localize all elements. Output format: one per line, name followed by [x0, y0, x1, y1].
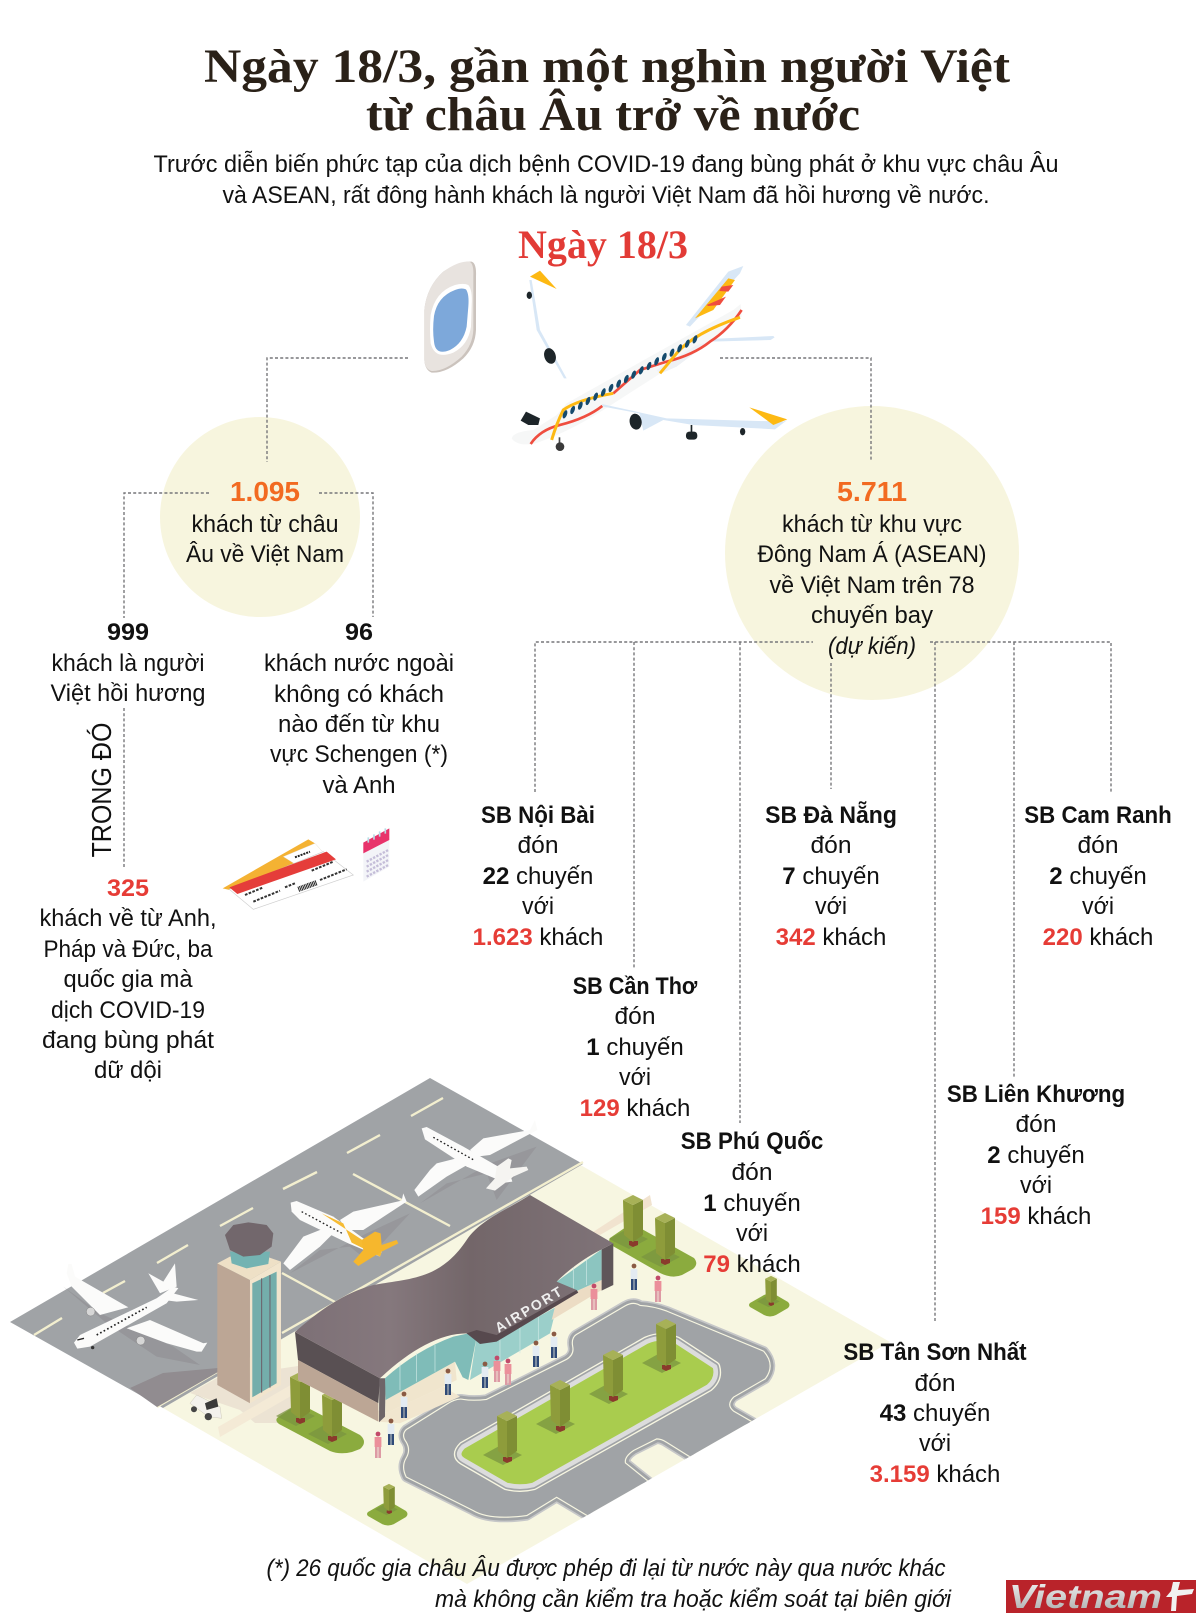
block: Cam Ranh: 220 khách: [1043, 924, 1153, 951]
illustration: airport: [10, 1078, 890, 1584]
block: Cam Ranh: [1024, 801, 1172, 951]
icon: tickets and calendar: [223, 828, 389, 909]
block: Cam Ranh: đón: [1078, 832, 1118, 859]
icon: airplane: [512, 266, 787, 451]
block: Can Tho: 129 khách: [580, 1095, 690, 1122]
block: 999 Vietnamese: Việt hồi hương: [50, 680, 206, 707]
ground: [163, 1163, 890, 1584]
block: Noi Bai: đón: [518, 832, 558, 859]
block: Da Nang: [765, 801, 897, 951]
block: Da Nang: 7 chuyến: [782, 863, 880, 890]
subtitle: [154, 151, 1058, 209]
block: Tan Son Nhat: [843, 1338, 1027, 1488]
terminal building: [295, 1195, 613, 1423]
block: 325 from UK, France, Germany: khách về từ Anh,: [40, 905, 216, 932]
block: 325 from UK, France, Germany: 325: [107, 875, 149, 902]
block: Noi Bai: với: [522, 893, 554, 920]
block: Can Tho: đón: [614, 1003, 656, 1030]
block: Can Tho: [573, 972, 698, 1122]
heading: date: Ngày 18/3: [518, 222, 688, 267]
block: 999 Vietnamese: khách là người: [52, 650, 204, 677]
block: Tan Son Nhat: 3.159 khách: [870, 1461, 1000, 1488]
block: 96 foreigners: nào đến từ khu: [278, 711, 440, 738]
block: Da Nang: 342 khách: [776, 924, 886, 951]
plane top: [414, 1120, 537, 1203]
block: Noi Bai: 22 chuyến: [483, 863, 593, 890]
block: Phu Quoc: [681, 1127, 823, 1278]
block: 325 from UK, France, Germany: [40, 875, 216, 1084]
title: [204, 40, 1010, 141]
block: Noi Bai: SB Nội Bài: [481, 801, 595, 828]
block: 5,711 from ASEAN: Đông Nam Á (ASEAN): [758, 541, 986, 568]
block: Da Nang: đón: [810, 832, 852, 859]
block: Can Tho: 1 chuyến: [586, 1034, 684, 1061]
block: 96 foreigners: và Anh: [322, 772, 396, 799]
circle: ASEAN: [725, 406, 1019, 700]
block: Can Tho: với: [619, 1064, 651, 1091]
block: 96 foreigners: vực Schengen (*): [270, 741, 448, 768]
road: [404, 1304, 800, 1527]
block: 96 foreigners: không có khách: [274, 681, 444, 708]
vertical label: among them: TRONG ĐÓ: [86, 722, 117, 858]
block: 325 from UK, France, Germany: quốc gia mà: [64, 966, 193, 993]
logo: Vietnam+: [1006, 1578, 1196, 1615]
block: Tan Son Nhat: với: [919, 1430, 951, 1457]
block: 5,711 from ASEAN: khách từ khu vực: [782, 511, 962, 538]
logo: Vietnam+: Vietnam: [1009, 1578, 1162, 1615]
block: Lien Khuong: đón: [1016, 1111, 1056, 1138]
title: từ châu Âu trở về nước: [366, 87, 860, 141]
icon: airplane window: [424, 262, 476, 373]
sign text: AIRPORT: [492, 1282, 566, 1336]
footnote: (*) 26 quốc gia châu Âu được phép đi lại từ nước này qua nước khác: [266, 1555, 946, 1582]
block: Lien Khuong: [947, 1080, 1125, 1230]
block: Tan Son Nhat: SB Tân Sơn Nhất: [843, 1338, 1027, 1365]
block: 5,711 from ASEAN: (dự kiến): [828, 633, 916, 660]
pavement shadow near tower: [190, 1366, 340, 1423]
block: Can Tho: SB Cần Thơ: [573, 972, 698, 999]
block: 325 from UK, France, Germany: dữ dội: [94, 1057, 162, 1084]
control tower: [217, 1222, 281, 1403]
footnote: [266, 1555, 952, 1613]
tower shadow: [130, 1368, 218, 1407]
block: 5,711 from ASEAN: chuyến bay: [811, 602, 933, 629]
block: Phu Quoc: đón: [732, 1159, 772, 1186]
block: Phu Quoc: SB Phú Quốc: [681, 1127, 823, 1154]
subtitle: Trước diễn biến phức tạp của dịch bệnh COVID-19 đang bùng phát ở khu vực châu Âu: [154, 151, 1058, 178]
block: 1,095 from Europe: khách từ châu: [192, 511, 338, 538]
fence right: [593, 1195, 652, 1235]
block: 1,095 from Europe: Âu về Việt Nam: [186, 541, 344, 568]
block: Phu Quoc: với: [736, 1220, 768, 1247]
block: Lien Khuong: SB Liên Khương: [947, 1080, 1125, 1107]
plane left: [63, 1263, 207, 1365]
small lawns: [276, 1226, 789, 1526]
central lawn: [459, 1338, 716, 1487]
title: Ngày 18/3, gần một nghìn người Việt: [204, 40, 1010, 93]
block: Noi Bai: 1.623 khách: [473, 924, 603, 951]
tarmac markings: [34, 1098, 583, 1407]
block: 96 foreigners: 96: [345, 619, 373, 646]
connector lines: [124, 358, 1111, 1323]
block: Da Nang: với: [815, 893, 847, 920]
subtitle: và ASEAN, rất đông hành khách là người Việt Nam đã hồi hương về nước.: [222, 182, 990, 209]
block: Tan Son Nhat: 43 chuyến: [880, 1400, 990, 1427]
block: 5,711 from ASEAN: về Việt Nam trên 78: [770, 572, 974, 599]
block: 999 Vietnamese: 999: [107, 619, 149, 646]
block: 96 foreigners: khách nước ngoài: [264, 650, 454, 677]
block: Cam Ranh: 2 chuyến: [1049, 863, 1147, 890]
block: 325 from UK, France, Germany: Pháp và Đức, ba: [44, 936, 213, 963]
block: Lien Khuong: 2 chuyến: [987, 1142, 1085, 1169]
block: Tan Son Nhat: đón: [914, 1370, 956, 1397]
circle: Europe: [160, 417, 360, 617]
fence left: [218, 1375, 310, 1437]
block: Da Nang: SB Đà Nẵng: [765, 801, 897, 828]
block: 96 foreigners: [264, 619, 454, 799]
block: Phu Quoc: 79 khách: [703, 1251, 801, 1278]
block: 1,095 from Europe: 1.095: [230, 476, 300, 507]
plane yellow tail: [283, 1193, 410, 1273]
block: 325 from UK, France, Germany: dịch COVID-19: [51, 997, 205, 1024]
tug vehicle: [190, 1395, 222, 1420]
block: 325 from UK, France, Germany: đang bùng phát: [42, 1027, 214, 1054]
block: Noi Bai: [473, 801, 603, 951]
block: 5,711 from ASEAN: 5.711: [837, 476, 907, 507]
block: Lien Khuong: 159 khách: [981, 1203, 1091, 1230]
block: 5,711 from ASEAN: [758, 476, 986, 660]
block: Cam Ranh: SB Cam Ranh: [1024, 801, 1172, 828]
block: 1,095 from Europe: [186, 476, 344, 568]
block: 999 Vietnamese: [50, 619, 206, 707]
tarmac: [10, 1078, 583, 1408]
block: Lien Khuong: với: [1020, 1172, 1052, 1199]
block: Cam Ranh: với: [1082, 893, 1114, 920]
passengers: [375, 1264, 661, 1458]
trees: [276, 1195, 780, 1515]
block: Phu Quoc: 1 chuyến: [703, 1190, 801, 1217]
footnote: mà không cần kiểm tra hoặc kiểm soát tại biên giới: [435, 1586, 952, 1613]
